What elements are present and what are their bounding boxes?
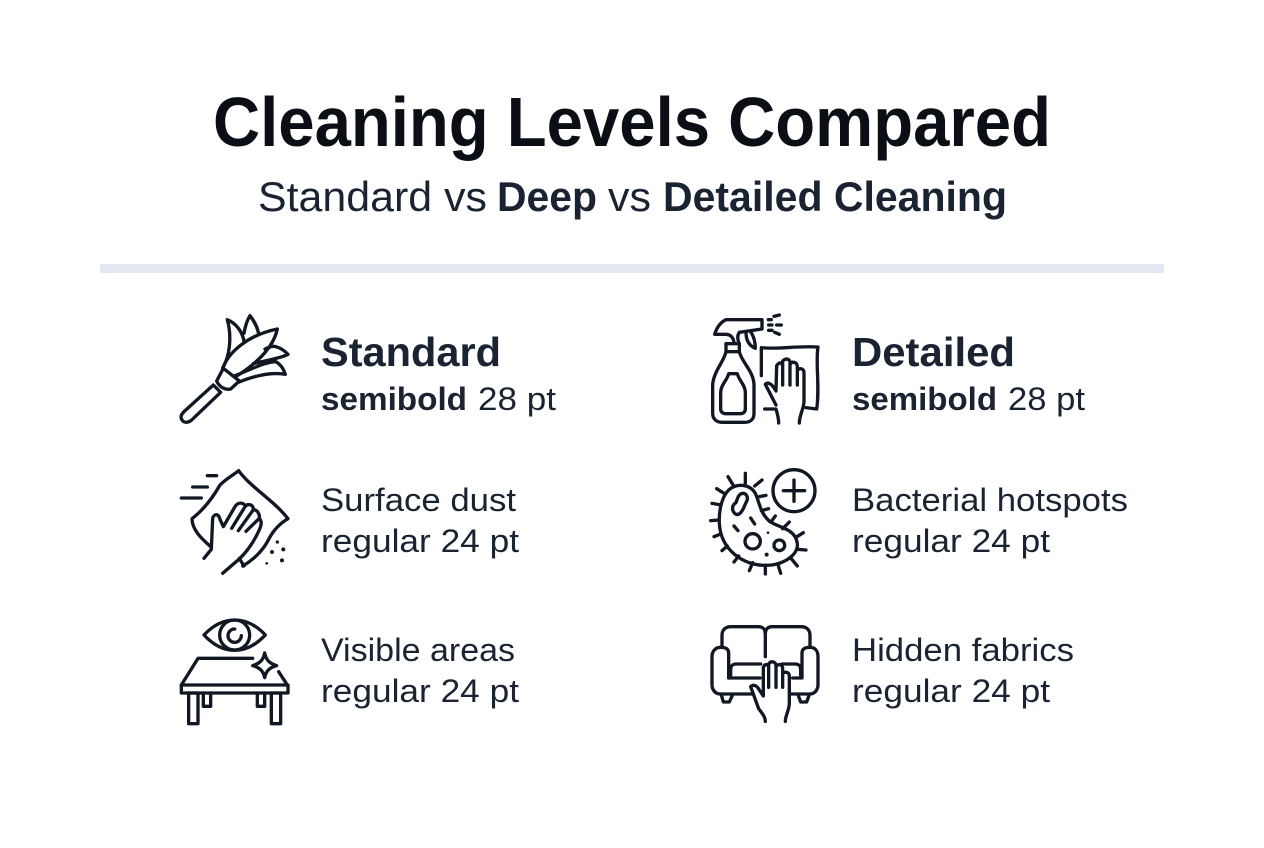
title: Cleaning Levels Compared [213, 83, 1051, 161]
label: Standard: 28 pt [478, 381, 556, 417]
icon: spray bottle and cloth with hand [713, 315, 818, 423]
label: Surface dust: regular 24 pt [321, 523, 519, 559]
label: Hidden fabrics: Hidden fabrics [852, 632, 1074, 668]
subtitle: Standard vs [258, 173, 487, 220]
subtitle: vs [608, 173, 651, 220]
subtitle: Detailed Cleaning [663, 173, 1007, 220]
label: Bacterial hotspots: regular 24 pt [852, 523, 1050, 559]
subtitle [258, 173, 1007, 220]
label: Visible areas [321, 632, 519, 709]
label: Bacterial hotspots [852, 482, 1128, 559]
label: Surface dust: Surface dust [321, 482, 516, 518]
label: Visible areas: regular 24 pt [321, 673, 519, 709]
icon: wiping cloth with hand [181, 471, 288, 573]
label: Detailed: Detailed [852, 329, 1015, 375]
label: Hidden fabrics: regular 24 pt [852, 673, 1050, 709]
subtitle: Deep [497, 173, 597, 220]
label: Standard: Standard [321, 329, 501, 375]
label: Hidden fabrics [852, 632, 1074, 709]
label: Visible areas: Visible areas [321, 632, 515, 668]
icon: feather duster [181, 316, 288, 422]
icon: eye above table with sparkle [181, 620, 288, 724]
icon: bacteria with plus sign [711, 470, 815, 574]
icon: sofa with hand [712, 627, 818, 721]
label: Detailed: 28 pt [1008, 381, 1085, 417]
label: Detailed [852, 329, 1085, 417]
label: Standard: semibold [321, 381, 467, 417]
label: Detailed: semibold [852, 381, 997, 417]
label: Standard [321, 329, 556, 417]
label: Surface dust [321, 482, 519, 559]
label: Bacterial hotspots: Bacterial hotspots [852, 482, 1128, 518]
